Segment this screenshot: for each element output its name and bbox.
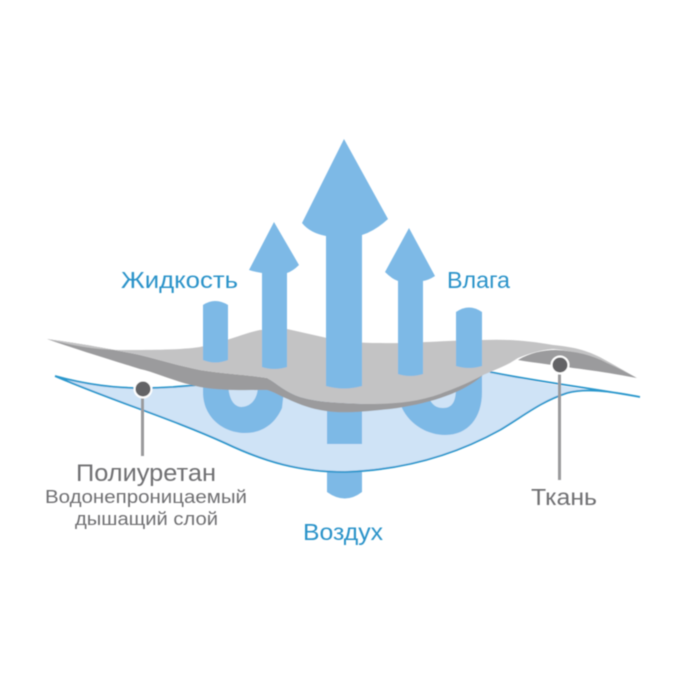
arrow: central up arrow (302, 139, 388, 388)
arrow: left up arrow (249, 222, 299, 369)
leader line: polyurethane (141, 398, 144, 456)
text labels (45, 267, 597, 545)
whole drawing (47, 139, 640, 498)
label: moisture: Влага (447, 267, 510, 293)
arrow: right stub (456, 308, 482, 368)
label: liquid: Жидкость (121, 267, 238, 293)
curved arrow: left U (203, 375, 284, 433)
arrow: left stub (203, 301, 228, 362)
label: air: Воздух (303, 519, 384, 545)
arrow: right up arrow (385, 228, 435, 376)
label: fabric: Ткань (531, 484, 597, 510)
membrane outline (55, 372, 640, 472)
fabric: dark underside, right (518, 350, 637, 378)
fabric: top surface (47, 329, 637, 404)
polyurethane membrane fill (55, 372, 640, 472)
marker: fabric (552, 356, 568, 374)
marker: polyurethane (134, 380, 152, 398)
arrow: mid section of air arrow (327, 410, 362, 444)
label: waterproof: Водонепроницаемый (45, 487, 247, 507)
fabric: dark underside, left and centre (47, 339, 483, 412)
label: polyurethane: Полиуретан (76, 460, 216, 487)
leader line: fabric (558, 372, 561, 480)
arrow: lower tail of air arrow (327, 445, 362, 498)
curved arrow: right U (400, 370, 482, 435)
label: breathable layer: дышащий слой (75, 509, 218, 529)
